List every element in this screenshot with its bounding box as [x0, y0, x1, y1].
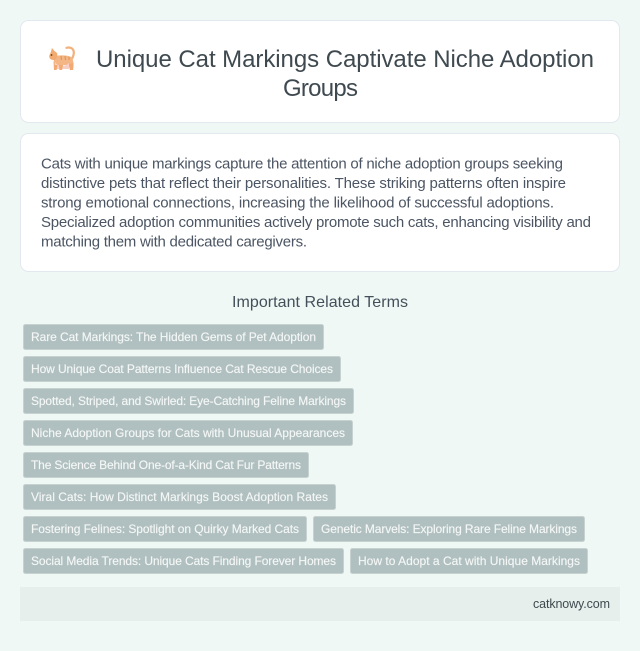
tag 8 — [314, 516, 584, 542]
tag 3 — [24, 388, 354, 414]
tag 7 — [24, 516, 306, 542]
title: Unique Cat Markings Captivate Niche Adoption — [96, 46, 594, 73]
tag 2: How Unique Coat Patterns Influence Cat Rescue Choices — [31, 362, 333, 376]
tag 6: Viral Cats: How Distinct Markings Boost Adoption Rates — [31, 490, 328, 504]
description text: Cats with unique markings capture the attention of niche adoption groups seeking — [41, 156, 563, 172]
tag 2 — [24, 356, 340, 382]
icon: cat — [49, 47, 74, 70]
footer site name: catknowy.com — [533, 597, 610, 611]
footer — [20, 587, 620, 621]
panel: description — [20, 134, 620, 272]
tag 9 — [24, 548, 344, 574]
panel: title card — [20, 20, 620, 122]
description text: strong emotional connections, increasing the likelihood of successful adoptions. — [41, 194, 554, 212]
tag 7: Fostering Felines: Spotlight on Quirky Marked Cats — [31, 522, 299, 536]
description text: Specialized adoption communities actively promote such cats, enhancing visibility and — [41, 214, 591, 231]
tag 3: Spotted, Striped, and Swirled: Eye-Catching Feline Markings — [31, 394, 346, 408]
tag 9: Social Media Trends: Unique Cats Finding Forever Homes — [31, 554, 336, 568]
title — [96, 46, 594, 102]
description text: distinctive pets that reflect their personalities. These striking patterns often inspire — [41, 175, 566, 192]
title: Groups — [283, 75, 358, 102]
tag 1 — [24, 324, 324, 350]
tag 6 — [24, 484, 336, 510]
heading: related terms: Important Related Terms — [232, 294, 408, 311]
tag 5: The Science Behind One-of-a-Kind Cat Fur Patterns — [31, 458, 301, 472]
description text — [41, 156, 591, 250]
tag 10: How to Adopt a Cat with Unique Markings — [358, 554, 580, 568]
tag 4 — [24, 420, 352, 446]
tag 4: Niche Adoption Groups for Cats with Unusual Appearances — [31, 426, 345, 440]
tag 5 — [24, 452, 308, 478]
description text: matching them with dedicated caregivers. — [41, 234, 307, 250]
tag 10 — [350, 548, 588, 574]
tag 8: Genetic Marvels: Exploring Rare Feline Markings — [321, 522, 577, 536]
tag list — [24, 324, 588, 574]
tag 1: Rare Cat Markings: The Hidden Gems of Pet Adoption — [31, 330, 316, 344]
